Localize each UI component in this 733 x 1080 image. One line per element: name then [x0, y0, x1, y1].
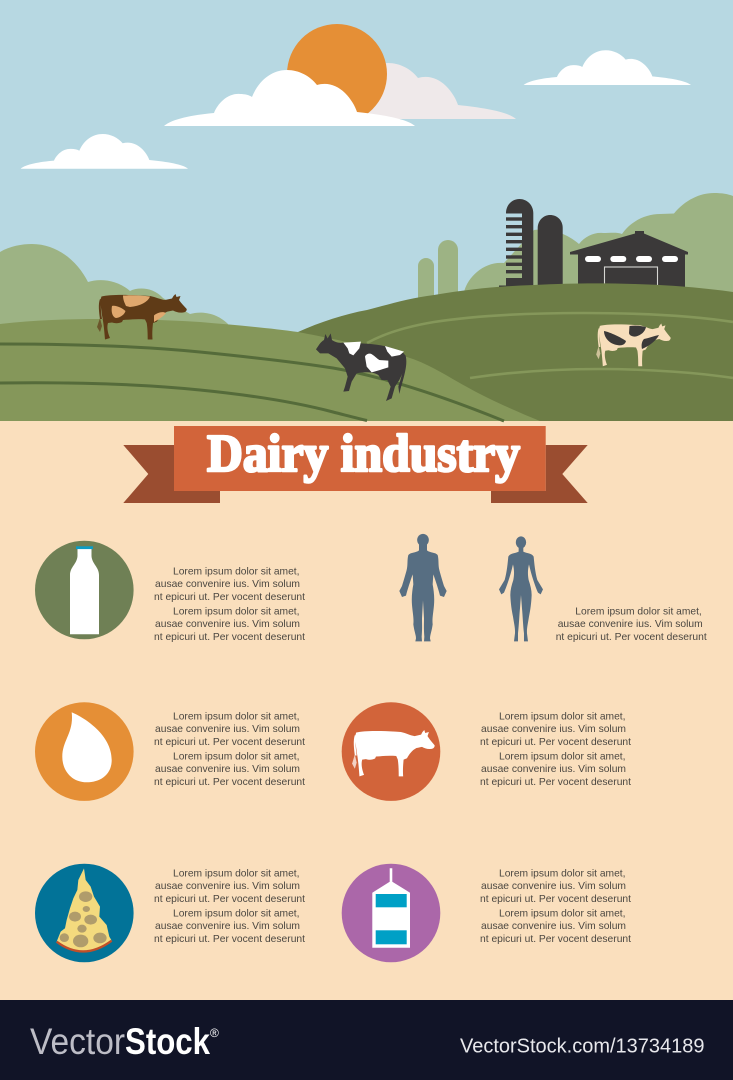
left small cloud — [21, 134, 188, 169]
footer logo: Stock — [125, 1021, 210, 1062]
right small cloud — [524, 50, 691, 85]
brown cow — [97, 294, 187, 340]
footer bar — [0, 1000, 733, 1080]
icon: cow — [342, 702, 440, 801]
text: human figures: ausae convenire ius. Vim solum — [558, 618, 703, 630]
pink cloud behind sun — [265, 63, 516, 119]
barn building — [570, 231, 688, 295]
cream cow — [596, 324, 671, 366]
back dark hill — [298, 283, 733, 421]
front green hill — [0, 319, 540, 421]
front hill dark furrows — [0, 344, 504, 421]
tall silo with ladder — [499, 199, 533, 290]
right background hills — [464, 193, 733, 310]
second silo — [538, 215, 563, 290]
main white cloud — [164, 70, 415, 126]
right ribbon tail — [491, 445, 588, 503]
barn windows — [585, 256, 678, 262]
ribbon front — [174, 426, 546, 491]
text: cheese — [154, 868, 305, 945]
text: human figures — [556, 606, 707, 643]
sky — [0, 0, 733, 421]
icon: milk drop — [35, 702, 134, 801]
distant light silos — [418, 240, 458, 310]
text: cow — [480, 710, 631, 788]
landscape scene — [0, 0, 733, 421]
footer logo: Vector — [30, 1021, 125, 1062]
icon: female figure — [499, 536, 543, 641]
barn — [570, 231, 688, 295]
banner — [123, 425, 588, 503]
back hill light furrows — [367, 313, 733, 378]
text: milk drop — [154, 710, 305, 788]
footer image id: VectorStock.com/13734189 — [460, 1036, 704, 1058]
icon: milk bottle — [35, 541, 134, 639]
text: human figures: Lorem ipsum dolor sit amet, — [575, 606, 702, 618]
icon: male figure — [399, 534, 447, 641]
title: Dairy industry — [207, 425, 520, 483]
icon: milk carton — [342, 864, 440, 962]
barn door — [604, 267, 658, 291]
text: milk bottle — [154, 566, 305, 643]
sun — [287, 24, 387, 124]
registered mark: ® — [210, 1026, 219, 1040]
left ribbon tail — [123, 445, 220, 503]
icon: cheese — [35, 864, 134, 962]
left background hills — [0, 244, 228, 340]
black and white cow — [316, 333, 406, 401]
text: human figures: nt epicuri ut. Per vocent deserunt — [556, 631, 707, 643]
text: milk carton — [480, 868, 631, 945]
